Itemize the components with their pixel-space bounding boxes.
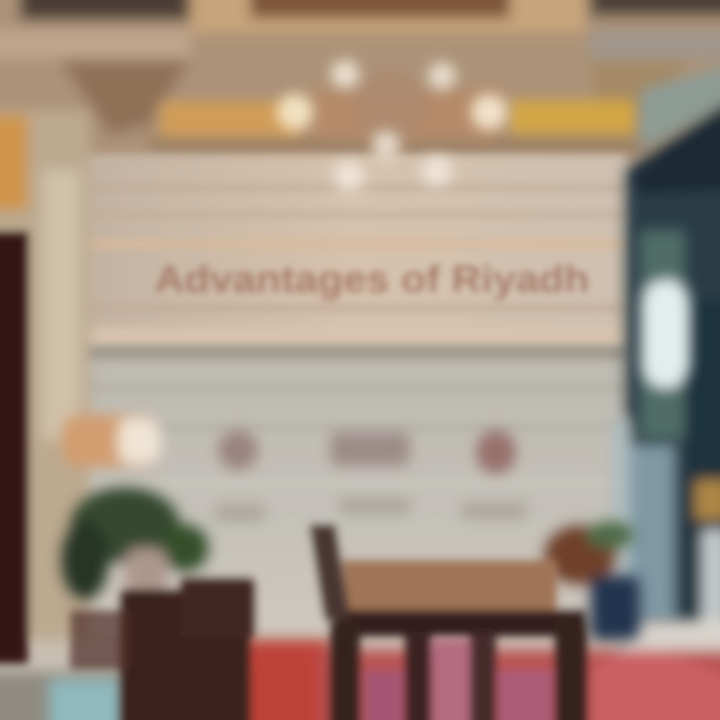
dark right structure	[612, 65, 720, 660]
dining table	[330, 560, 587, 720]
chandelier	[277, 60, 507, 191]
ceiling lights	[160, 90, 636, 138]
right plant and pot	[544, 521, 640, 640]
three wall icons	[215, 430, 527, 521]
ceiling	[0, 0, 720, 160]
heading on wall: Advantages of Riyadh	[154, 259, 590, 301]
wall upper	[85, 155, 625, 346]
dark left doorway	[0, 232, 28, 664]
floor	[0, 620, 720, 720]
right window	[640, 230, 690, 440]
table lamp	[62, 415, 160, 467]
left column	[0, 110, 90, 640]
wall lower	[85, 345, 625, 630]
left plant	[61, 487, 209, 610]
dining chair back	[310, 525, 350, 620]
armchair	[70, 578, 255, 720]
